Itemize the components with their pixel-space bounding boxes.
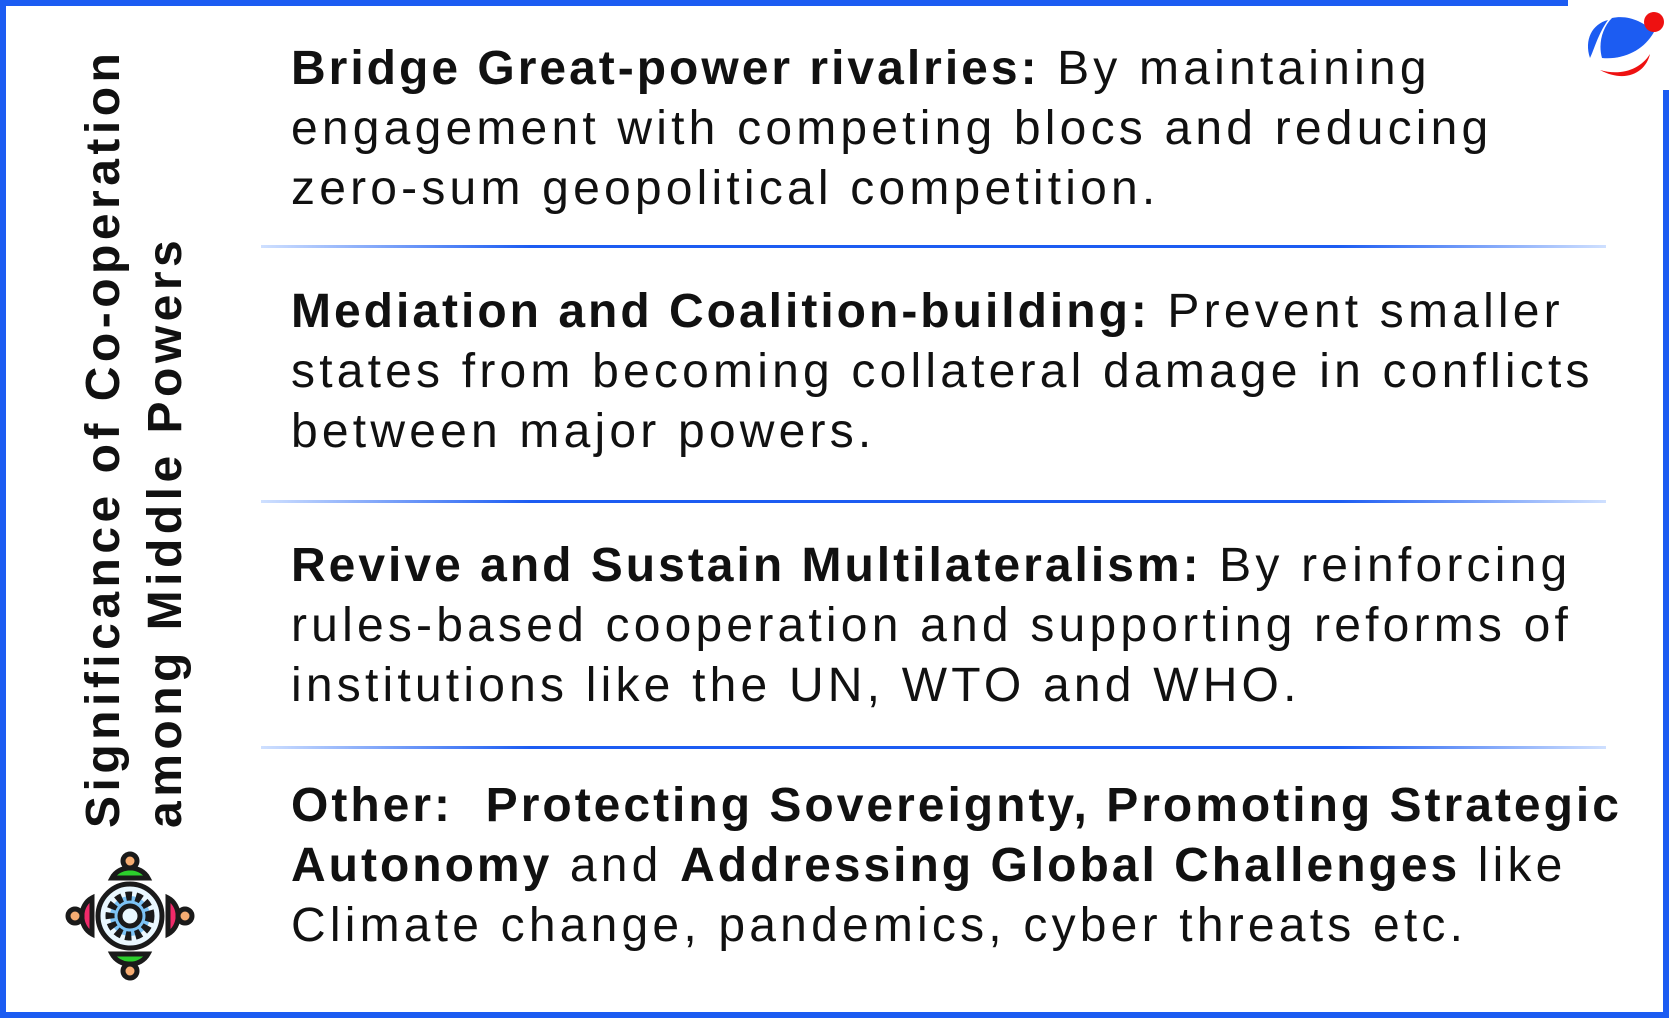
vertical title: Significance of Co-operation: [77, 49, 130, 828]
icon: cooperation gear: [66, 852, 194, 980]
vertical title: [77, 49, 192, 828]
section: other: Other: Protecting Sovereignty, Promoting Strategic: [291, 779, 1622, 832]
section: multilateralism: rules-based cooperation and supporting reforms of: [291, 599, 1572, 652]
section: other: Autonomy and Addressing Global Challenges like: [291, 839, 1567, 892]
section: bridge rivalries: [291, 42, 1492, 215]
section: mediation: states from becoming collateral damage in conflicts: [291, 345, 1594, 398]
logo: [1588, 12, 1664, 76]
section: mediation: Mediation and Coalition-building: Prevent smaller: [291, 285, 1564, 338]
vertical title: among Middle Powers: [139, 236, 192, 828]
section: bridge rivalries: zero-sum geopolitical competition.: [291, 162, 1159, 215]
section: other: Climate change, pandemics, cyber threats etc.: [291, 899, 1467, 952]
section: other: [291, 779, 1622, 952]
section: mediation: [291, 285, 1594, 458]
section: multilateralism: institutions like the UN, WTO and WHO.: [291, 659, 1301, 712]
section: multilateralism: Revive and Sustain Multilateralism: By reinforcing: [291, 539, 1571, 592]
section: multilateralism: [291, 539, 1572, 712]
section: bridge rivalries: Bridge Great-power rivalries: By maintaining: [291, 42, 1431, 95]
section: mediation: between major powers.: [291, 405, 875, 458]
section: bridge rivalries: engagement with competing blocs and reducing: [291, 102, 1492, 155]
